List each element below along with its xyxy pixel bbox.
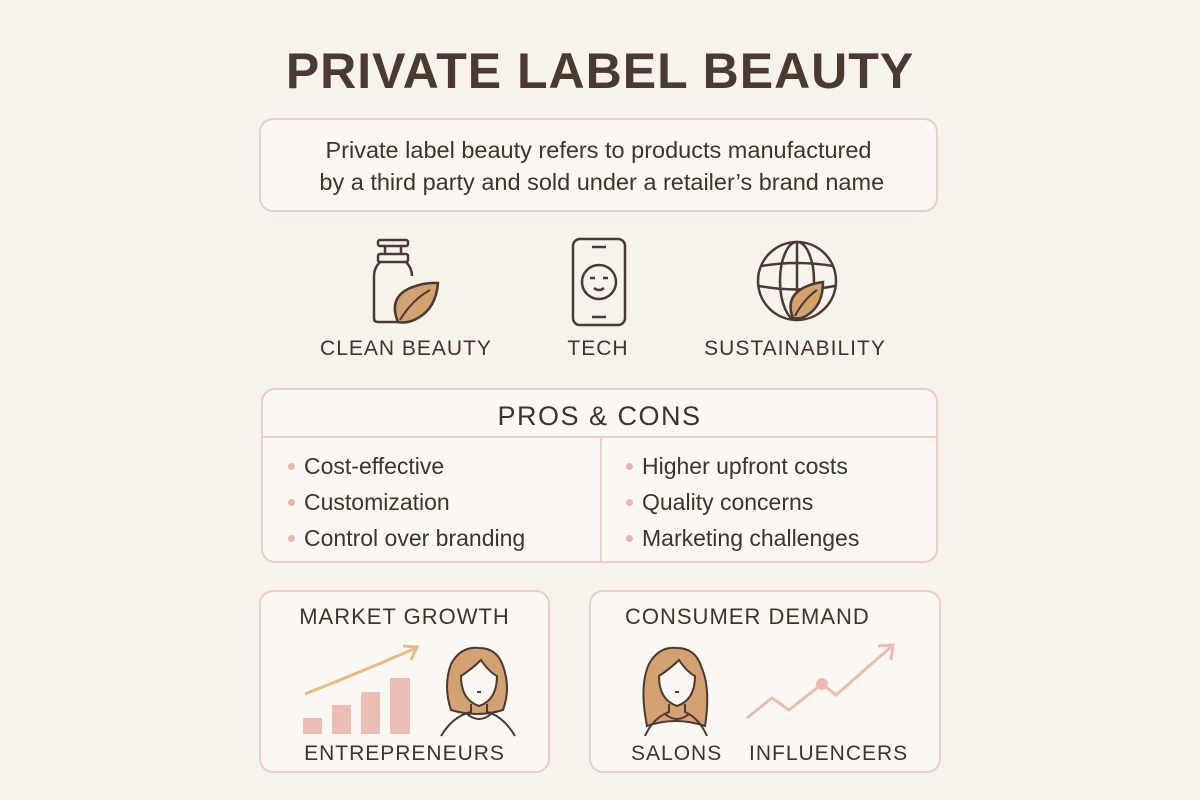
title: PRIVATE LABEL BEAUTY — [286, 43, 914, 99]
panel: consumer demand — [589, 590, 941, 773]
icon: salon woman — [642, 646, 708, 736]
heading: market growth: MARKET GROWTH — [299, 604, 510, 629]
icon: clean beauty bottle — [372, 238, 440, 324]
icon: sustainability globe — [756, 240, 838, 322]
label: tech: TECH — [567, 337, 629, 360]
cons list: Higher upfront costs — [642, 453, 848, 479]
pros list: Customization — [304, 489, 450, 515]
icon: entrepreneur woman — [440, 646, 516, 736]
pros list — [288, 453, 525, 551]
icon: tech phone — [572, 238, 626, 326]
cons list — [626, 453, 859, 551]
label: clean beauty: CLEAN BEAUTY — [320, 337, 492, 360]
panel: market growth — [259, 590, 550, 773]
definition box: by a third party and sold under a retailer’s brand name — [319, 169, 884, 195]
heading: pros & cons: PROS & CONS — [497, 401, 702, 431]
heading: consumer demand: CONSUMER DEMAND — [625, 604, 870, 629]
cons list: Quality concerns — [642, 489, 813, 515]
pros list: Cost-effective — [304, 453, 444, 479]
label: sustainability: SUSTAINABILITY — [704, 337, 886, 360]
cons list: Marketing challenges — [642, 525, 859, 551]
label: influencers: INFLUENCERS — [749, 742, 908, 765]
panel: pros & cons — [261, 388, 938, 563]
chart: bars with arrow — [303, 644, 420, 734]
label: salons: SALONS — [631, 742, 722, 765]
definition box — [259, 118, 938, 212]
pros list: Control over branding — [304, 525, 525, 551]
label: entrepreneurs: ENTREPRENEURS — [304, 742, 505, 765]
definition box: Private label beauty refers to products manufactured — [325, 137, 872, 163]
chart: influencer trend line — [746, 643, 895, 719]
